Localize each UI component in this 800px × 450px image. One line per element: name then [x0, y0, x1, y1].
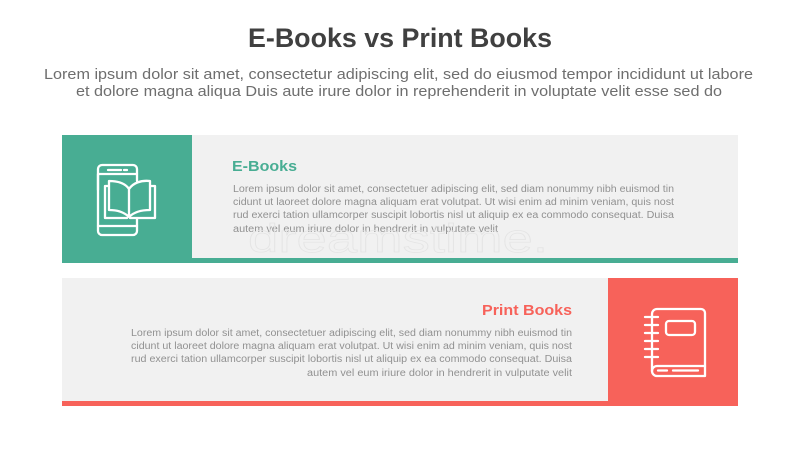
text block: print books description: rud exerci tation ullamcorper suscipit lobortis nisl ut aliquip ex ea commodo consequat. Duisa: [131, 354, 572, 365]
title: E-Books vs Print Books: [248, 23, 552, 53]
subtitle text: Lorem ipsum dolor sit amet, consectetur adipiscing elit, sed do eiusmod tempor incididunt ut labore: [44, 67, 753, 83]
text block: print books description: [131, 328, 572, 379]
red icon block: [608, 278, 738, 406]
text block: e-books description: [233, 184, 674, 235]
heading: print books: Print Books: [482, 303, 572, 319]
panel: e-books: [62, 135, 738, 263]
subtitle text: et dolore magna aliqua Duis aute irure dolor in reprehenderit in voluptate velit esse sed do: [76, 84, 722, 100]
watermark: dreamstime.: [248, 217, 548, 261]
text block: e-books description: autem vel eum iriure dolor in hendrerit in vulputate velit: [233, 224, 498, 235]
text block: e-books description: Lorem ipsum dolor sit amet, consectetuer adipiscing elit, sed diam nonummy nibh euismod tin: [233, 184, 674, 195]
text block: e-books description: rud exerci tation ullamcorper suscipit lobortis nisl ut aliquip ex ea commodo consequat. Duisa: [233, 210, 674, 221]
text block: print books description: Lorem ipsum dolor sit amet, consectetuer adipiscing elit, sed diam nonummy nibh euismod tin: [131, 328, 572, 339]
icon: phone with open book: [98, 165, 155, 235]
subtitle text: [44, 67, 753, 100]
text block: print books description: autem vel eum iriure dolor in hendrerit in vulputate velit: [307, 368, 572, 379]
icon: spiral notebook: [645, 309, 705, 376]
text block: e-books description: cidunt ut laoreet dolore magna aliquam erat volutpat. Ut wisi enim ad minim veniam, quis nost: [233, 197, 674, 208]
heading: e-books: E-Books: [232, 159, 297, 175]
text block: print books description: cidunt ut laoreet dolore magna aliquam erat volutpat. Ut wisi enim ad minim veniam, quis nost: [131, 341, 572, 352]
green icon block: [62, 135, 192, 263]
panel: print books: [62, 278, 738, 406]
